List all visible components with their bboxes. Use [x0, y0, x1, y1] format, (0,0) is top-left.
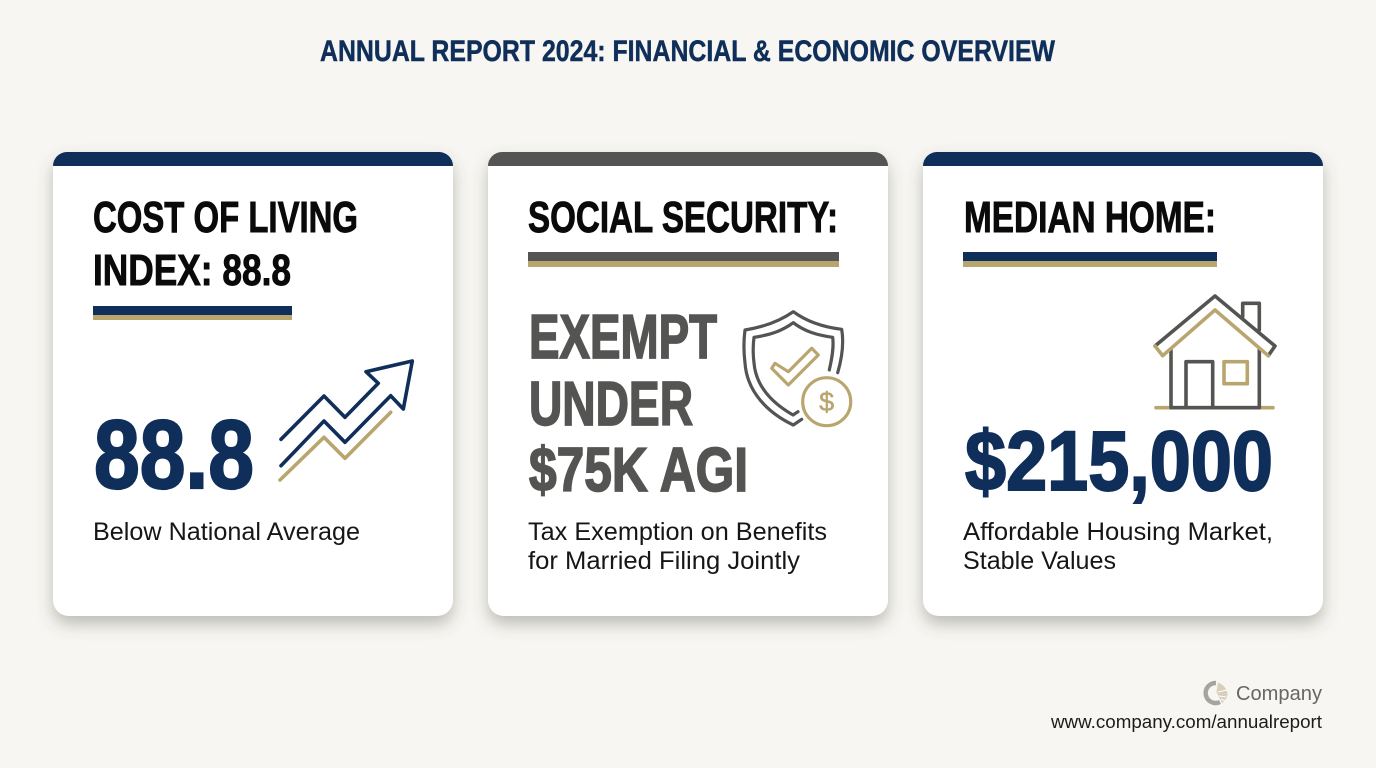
heading underline — [528, 252, 839, 267]
footer logo — [1206, 682, 1322, 705]
caption: affordable housing: Affordable Housing Market, — [963, 518, 1273, 546]
heading: cost of living index — [93, 193, 358, 295]
big statement: exempt under $75k agi: EXEMPT — [529, 303, 717, 372]
panel top bar: navy — [923, 152, 1323, 166]
icon: company logo — [1206, 682, 1228, 703]
icon: house — [1155, 296, 1275, 408]
panel: median home — [923, 152, 1323, 616]
big number: $215,000: $215,000 — [965, 414, 1273, 508]
heading: cost of living index: INDEX: 88.8 — [93, 246, 291, 295]
caption: below national average: Below National Average — [93, 518, 360, 546]
caption: tax exemption: Tax Exemption on Benefits — [528, 518, 827, 546]
big number: 88.8: 88.8 — [94, 400, 254, 509]
icon: shield with check and dollar coin — [744, 312, 851, 426]
big statement: exempt under $75k agi: $75K AGI — [529, 436, 748, 505]
heading underline — [93, 306, 292, 320]
icon: rising arrow — [280, 361, 412, 480]
panel: cost of living — [53, 152, 453, 616]
footer url: www.company.com/annualreport — [1050, 712, 1322, 732]
big statement: exempt under $75k agi — [529, 303, 748, 505]
company name: Company — [1236, 683, 1322, 705]
title: ANNUAL REPORT 2024: FINANCIAL & ECONOMIC OVERVIEW — [320, 35, 1056, 68]
caption: tax exemption: for Married Filing Jointly — [528, 547, 801, 575]
heading underline — [963, 252, 1217, 267]
heading: median home: MEDIAN HOME: — [964, 193, 1216, 242]
caption: affordable housing — [963, 518, 1273, 575]
caption: tax exemption — [528, 518, 827, 575]
big statement: exempt under $75k agi: UNDER — [529, 370, 693, 439]
icon: shield with check and dollar coin: $ — [819, 387, 834, 417]
heading: social security: SOCIAL SECURITY: — [528, 193, 838, 242]
heading: cost of living index: COST OF LIVING — [93, 193, 358, 242]
panel: social security — [488, 152, 888, 616]
panel top bar: navy — [53, 152, 453, 166]
panel top bar: grey — [488, 152, 888, 166]
caption: affordable housing: Stable Values — [963, 547, 1116, 575]
